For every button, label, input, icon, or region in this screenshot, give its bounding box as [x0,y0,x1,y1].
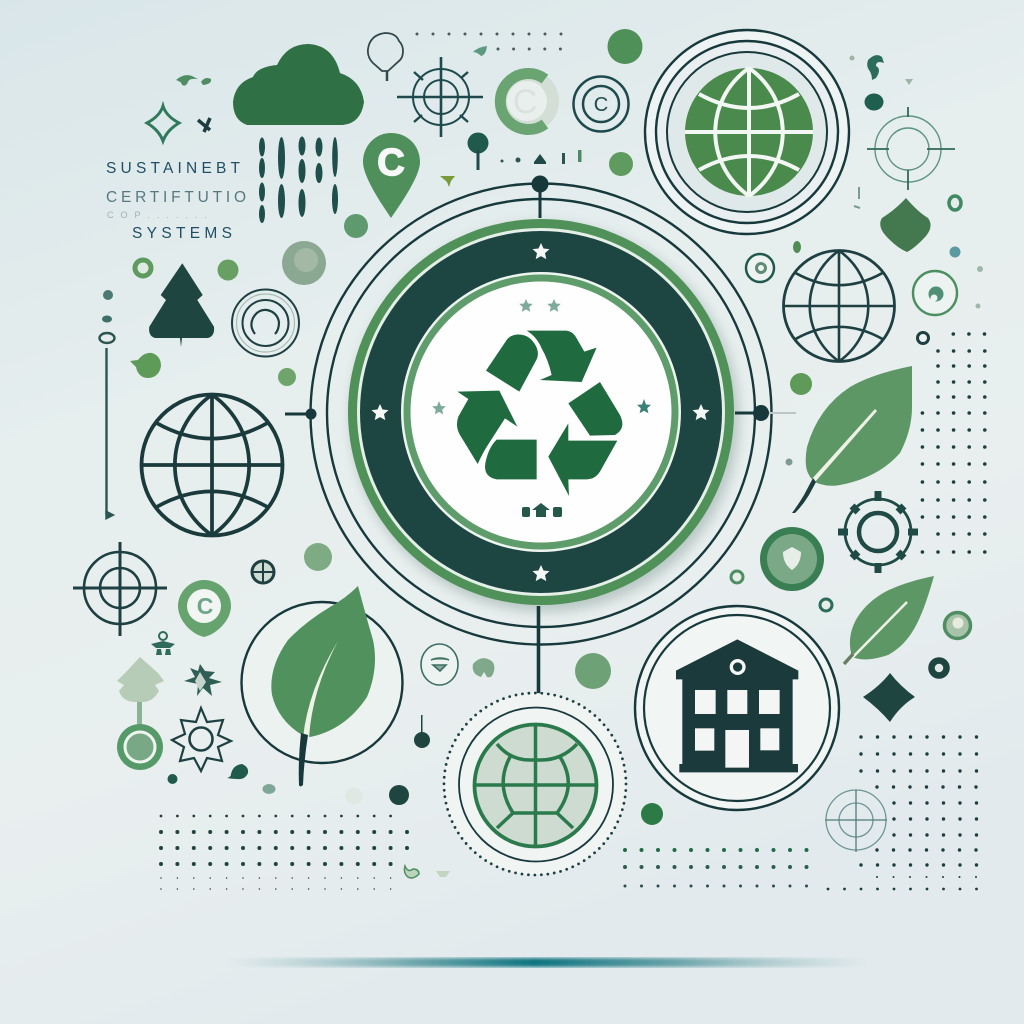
green edge [348,219,734,605]
connectors [285,176,796,696]
inner rings [401,272,681,552]
dots: small marks [500,150,582,164]
icon: dark dots [389,715,430,805]
icon: dark pin top [468,132,488,170]
icon: vertical pole [100,290,114,518]
icon: drops [168,764,248,784]
outer thin rings [310,184,772,644]
icon: small blob left [135,260,151,276]
icon: pale tree with ring [117,657,164,770]
icon: C badge: C [197,593,213,619]
icon: C ring: C [513,83,537,121]
icon: green dot [304,543,332,571]
icon: dark tree [149,263,214,347]
bottom shadow bar [225,958,870,967]
icon: location pin C [363,133,420,218]
icon: dark four point star [863,673,915,722]
dots: right grid [922,334,986,552]
icon: recycling symbol [457,331,622,496]
icon: building in circle [635,606,839,810]
icon: pale dot [346,788,362,804]
dark band [360,231,722,593]
icon: thin crosshair right [867,107,955,190]
shadow [351,224,739,612]
dots: second row [498,48,576,50]
band stars [372,243,710,581]
icon: small spiky star [184,664,222,696]
icon: tiny teal mark [473,46,487,56]
icon: rain cloud [233,44,364,223]
title text [106,160,246,242]
icon: dark outline globe right [784,250,894,362]
icon: large right leaf [792,366,912,513]
inner stars [432,299,651,414]
icon: grey-green circle [282,241,326,285]
icon: green blob [130,353,161,378]
icon: thin crosshair bottom right [825,790,887,852]
icon: tiny olive mark [440,176,455,187]
dots: bottom left grid [161,816,411,889]
icon: bottom green globe [444,693,626,875]
icon: top crosshair [397,57,483,137]
icon: C ring small [746,254,774,282]
icon: tiny dots right [786,246,983,466]
icon: spiral rings [232,290,299,356]
title text: SYSTEMS [132,225,232,242]
icon: small figure [151,632,175,655]
icon: concentric C [574,76,628,132]
icon: ring right [944,612,970,638]
icon: small x [198,118,210,132]
icon: globe filled in rings [645,30,849,234]
icon: green ring [913,271,957,315]
icon: swirl top left [176,75,211,86]
icon: face outline [368,33,403,81]
icon: dark ring [932,660,946,676]
icon: small ring right [949,196,961,210]
title text: C O P . . . . . . . [107,210,207,220]
icon: green dot [575,653,611,689]
icon: green dot small [278,368,296,386]
icon: small right leaf [844,576,934,664]
central ring system [285,176,796,696]
icon: green dot [641,803,663,825]
icon: concentric C: C [594,94,608,116]
icon: green dark badge [760,527,824,591]
bottom marks [522,503,562,517]
icon: small marks right [854,187,860,208]
icon: small leaf at grid [404,866,419,878]
icon: tiny green [793,241,801,253]
icon: leaf in circle [242,586,402,786]
title text: SUSTAINEBT [106,160,241,177]
icon: green dot [344,214,368,238]
icon: green dot [790,373,812,395]
icon: crosshair left [73,542,167,636]
icon: swirl right [867,55,884,80]
dots: bottom centre grid [625,850,811,886]
icon: small flower [252,561,274,583]
icon: dark dot [864,94,884,110]
icon: small dark ring [918,332,928,344]
icon: small blob [218,260,238,280]
icon: location pin C: C [377,142,405,184]
icon: small rings [731,571,832,611]
icon: tiny marks top right [850,56,913,85]
dots: bottom right grid [828,737,982,889]
icon: C badge [178,580,231,637]
icon: green dot right of centre [609,152,633,176]
icon: diamond dark green [880,198,931,252]
title text: CERTIFTUTIO [106,189,246,206]
icon: C ring [500,74,553,130]
icon: small flower [473,658,494,677]
icon: gear [838,491,918,573]
icon: green dot top [608,29,642,64]
icon: large left globe [142,394,282,536]
icon: pale mark [436,871,450,877]
icon: teal dot [262,784,276,794]
icon: rings near bottom [421,644,458,685]
icon: outline sun star [172,708,231,771]
dots: top row [417,32,577,36]
icon: diamond outline [147,106,179,141]
